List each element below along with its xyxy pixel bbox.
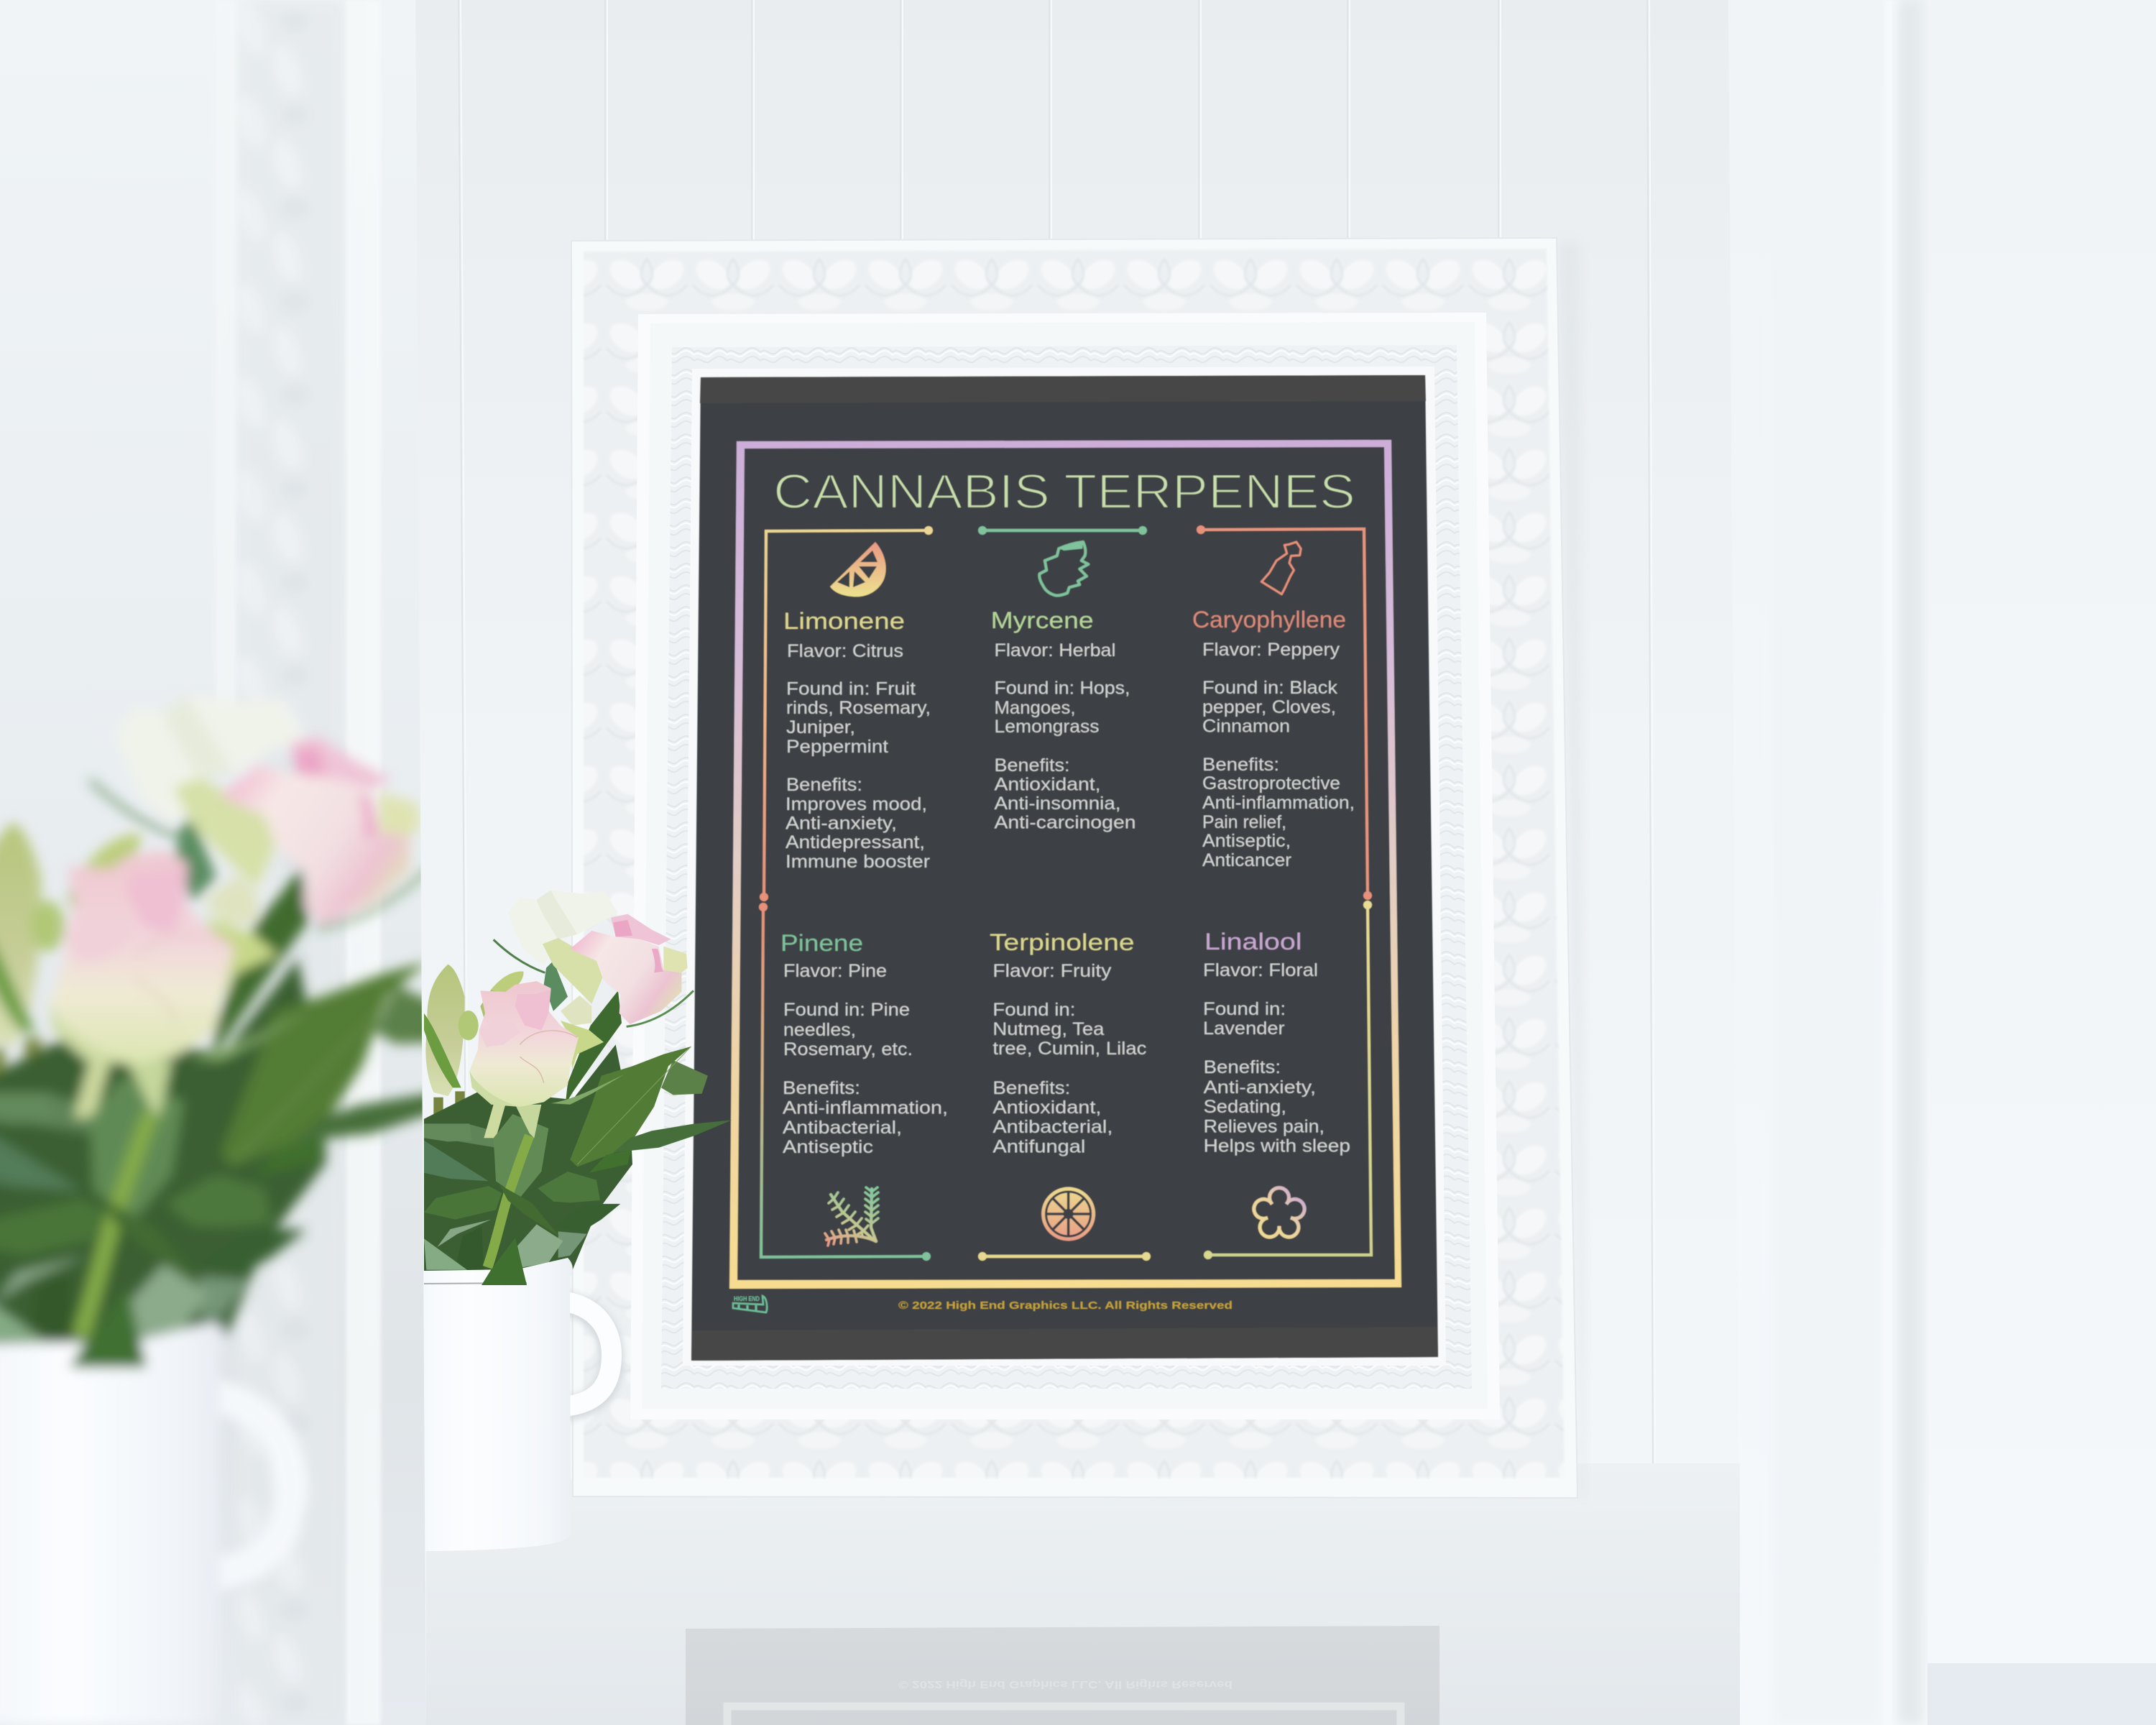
poster reflection on the tabletop <box>686 1626 1439 1725</box>
blurred mug body <box>0 1322 224 1725</box>
text: found in: tree, Cumin, Lilac <box>992 1039 1146 1059</box>
blurred foliage and roses <box>0 697 423 1351</box>
icon: pine sprigs <box>825 1187 878 1246</box>
panel: Terpinolene <box>990 929 1146 1241</box>
text: flavor: Flavor: Pine <box>783 961 887 981</box>
text: benefits: Benefits: <box>783 1078 860 1098</box>
text: found in: Juniper, <box>786 717 855 737</box>
text: benefits <box>1204 1057 1350 1156</box>
footer copyright: © 2022 High End Graphics LLC. All Rights Reserved <box>898 1300 1233 1312</box>
text: found in: Found in: Pine <box>783 1000 910 1020</box>
text: found in: Rosemary, etc. <box>783 1039 913 1059</box>
text: benefits: Helps with sleep <box>1204 1136 1350 1156</box>
text: benefits <box>1202 755 1355 870</box>
text: benefits: Anti-inflammation, <box>783 1098 948 1118</box>
text: found in: Cinnamon <box>1202 717 1290 737</box>
text: benefits: Antiseptic <box>783 1137 873 1157</box>
text: found in: Lavender <box>1203 1018 1285 1039</box>
text: flavor: Flavor: Herbal <box>995 640 1115 661</box>
text: benefits: Antiseptic, <box>1202 831 1291 851</box>
front leaf over the rim <box>482 1238 527 1285</box>
blurred front leaf <box>70 1287 147 1368</box>
text: found in <box>995 678 1130 737</box>
sharp bouquet of roses in white mug <box>424 890 732 1551</box>
text: found in: Found in: Hops, <box>995 678 1130 699</box>
text: benefits: Improves mood, <box>786 794 927 814</box>
panel: Linalool <box>1203 929 1350 1237</box>
corner bracket: bottom right <box>1204 901 1372 1259</box>
text: benefits: Antioxidant, <box>992 1098 1101 1118</box>
text: found in <box>783 1000 913 1059</box>
text: benefits: Immune booster <box>786 852 930 872</box>
white ornate picture frame <box>571 238 1585 1498</box>
icon: pepper mill <box>1261 542 1301 594</box>
heading: Myrcene: Myrcene <box>991 607 1094 633</box>
text: benefits <box>786 775 930 872</box>
title: CANNABIS TERPENES <box>773 464 1355 519</box>
background: blurred left pilaster panel <box>0 0 431 1725</box>
panel: Myrcene <box>991 542 1135 833</box>
text: flavor: Flavor: Floral <box>1203 960 1318 980</box>
foliage and roses <box>424 890 732 1274</box>
text: benefits <box>783 1078 948 1157</box>
corner bracket: bottom left <box>759 903 931 1261</box>
text: found in: Found in: <box>992 1000 1075 1020</box>
text: benefits: Benefits: <box>786 775 862 795</box>
text: found in <box>786 678 931 757</box>
text: benefits: Benefits: <box>1204 1057 1281 1077</box>
text: benefits: Anti-anxiety, <box>1204 1077 1316 1098</box>
divider: top middle <box>978 526 1147 535</box>
text: benefits: Antibacterial, <box>992 1117 1112 1137</box>
text: benefits: Antifungal <box>992 1137 1085 1157</box>
text: benefits: Antibacterial, <box>783 1118 902 1138</box>
poster reflection on the tabletop: © 2022 High End Graphics LLC. All Rights Reserved <box>898 1678 1233 1690</box>
mug body <box>424 1258 573 1551</box>
text: benefits: Benefits: <box>995 755 1069 776</box>
text: benefits: Benefits: <box>992 1078 1070 1098</box>
corner bracket: top left <box>760 526 933 901</box>
icon: flower outline <box>1254 1188 1304 1237</box>
text: benefits: Anti-inflammation, <box>1202 793 1355 813</box>
text: benefits <box>995 755 1135 833</box>
text: found in: Found in: Black <box>1202 678 1338 698</box>
text: benefits: Antidepressant, <box>786 832 925 852</box>
mug handle <box>570 1292 622 1416</box>
corner bracket: top right <box>1197 525 1372 900</box>
heading: Linalool: Linalool <box>1204 929 1302 954</box>
text: benefits: Anti-insomnia, <box>995 794 1121 814</box>
text: benefits: Benefits: <box>1202 755 1279 775</box>
text: found in <box>992 1000 1146 1059</box>
text: flavor: Flavor: Fruity <box>992 961 1112 981</box>
poster sheet <box>691 375 1438 1361</box>
text: benefits: Sedating, <box>1204 1097 1286 1117</box>
text: benefits: Anti-carcinogen <box>995 813 1135 833</box>
text: found in <box>1203 999 1286 1039</box>
text: benefits: Anticancer <box>1202 850 1291 870</box>
icon: mint leaf <box>1039 542 1088 596</box>
mug handle shadow <box>544 1302 612 1409</box>
text: flavor: Flavor: Citrus <box>787 641 903 661</box>
panel: Limonene <box>783 542 931 872</box>
text: benefits: Relieves pain, <box>1204 1117 1325 1137</box>
text: benefits: Anti-anxiety, <box>786 814 897 834</box>
text: found in: Peppermint <box>786 737 888 757</box>
mug rim line <box>424 1283 527 1284</box>
text: found in: Mangoes, <box>995 698 1075 718</box>
logo: High End <box>733 1295 767 1312</box>
poster <box>691 375 1438 1361</box>
text: benefits: Gastroprotective <box>1202 773 1340 794</box>
heading: Caryophyllene: Caryophyllene <box>1192 607 1346 632</box>
text: found in: Lemongrass <box>995 717 1100 737</box>
text: benefits <box>992 1078 1112 1157</box>
text: benefits: Antioxidant, <box>995 775 1101 795</box>
icon: orange slice <box>1041 1187 1095 1241</box>
icon: citrus wedge <box>830 542 886 597</box>
blurred foreground bouquet and mug <box>0 697 423 1725</box>
text: found in: pepper, Cloves, <box>1202 697 1336 717</box>
panel: Pinene <box>780 930 948 1246</box>
logo: High End: HIGH END <box>734 1295 760 1302</box>
background: centre wall panel <box>415 0 1740 1725</box>
heading: Limonene: Limonene <box>783 608 905 634</box>
panel: Caryophyllene <box>1192 542 1355 870</box>
text: found in: rinds, Rosemary, <box>786 698 931 718</box>
gradient outer border <box>729 440 1401 1289</box>
text: found in <box>1202 678 1338 737</box>
text: benefits: Pain relief, <box>1202 812 1286 832</box>
tabletop <box>426 1463 1740 1725</box>
text: found in: Found in: Fruit <box>786 678 916 699</box>
text: flavor: Flavor: Peppery <box>1202 640 1340 660</box>
background: blurred right pilaster panel <box>1728 0 2156 1725</box>
text: found in: Found in: <box>1203 999 1286 1019</box>
heading: Terpinolene: Terpinolene <box>990 929 1135 955</box>
heading: Pinene: Pinene <box>780 930 863 956</box>
divider: bottom middle <box>978 1252 1151 1261</box>
blurred mug handle <box>218 1381 308 1589</box>
text: found in: needles, <box>783 1020 856 1040</box>
text: found in: Nutmeg, Tea <box>992 1019 1104 1039</box>
